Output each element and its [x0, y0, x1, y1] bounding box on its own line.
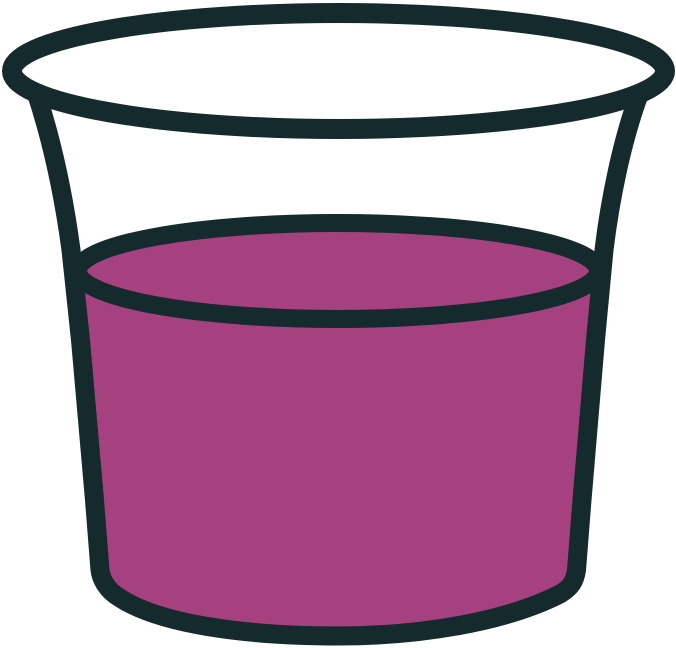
- cup rim: [12, 13, 665, 129]
- cup walls and base: [36, 92, 640, 636]
- liquid body: [73, 270, 603, 636]
- liquid surface: [78, 223, 598, 319]
